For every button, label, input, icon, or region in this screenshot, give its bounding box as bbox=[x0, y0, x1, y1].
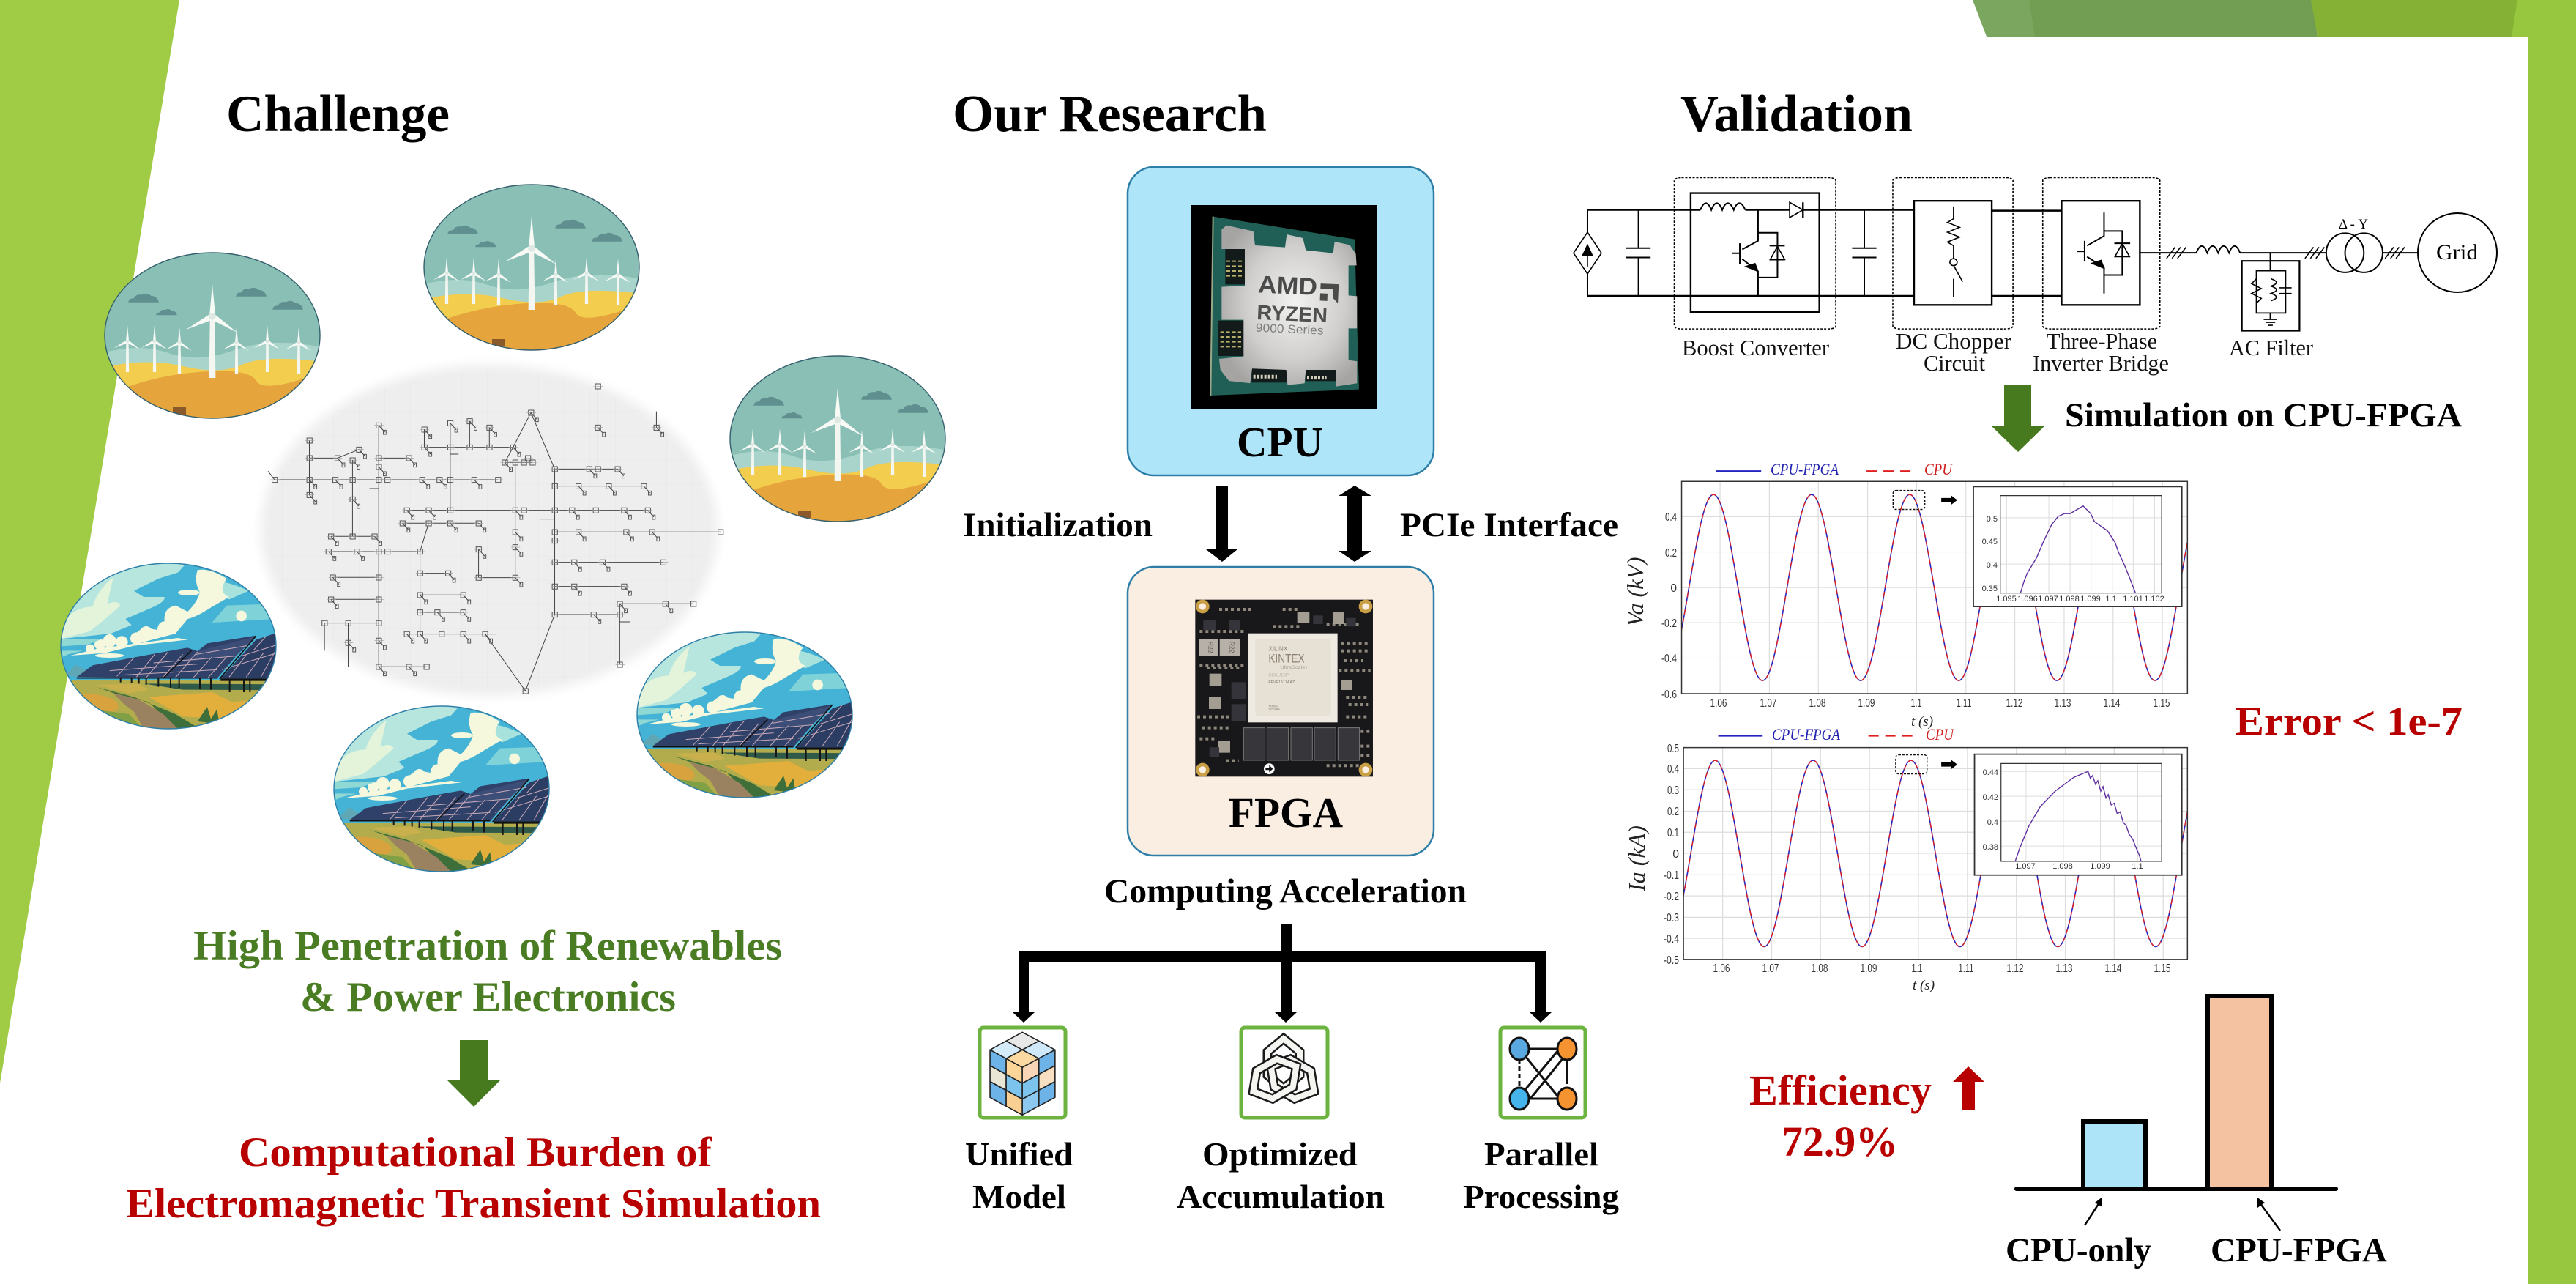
label: unified model: Model bbox=[972, 1178, 1066, 1215]
chart: Ia current: 1.14 bbox=[2104, 962, 2122, 975]
label: optimized accumulation bbox=[1177, 1135, 1385, 1215]
chart: Ia current: Ia (kA) bbox=[1623, 825, 1650, 892]
chart: Va voltage: t (s) bbox=[1911, 714, 1933, 730]
right green strip bbox=[2528, 0, 2576, 1284]
chart: Ia current: 1.08 bbox=[1812, 962, 1828, 975]
chart: Va voltage: 0.4 bbox=[1987, 561, 1998, 570]
arrow: CPU-only pointer bbox=[2085, 1198, 2102, 1225]
label: computing acceleration: Computing Acceleration bbox=[1104, 872, 1467, 910]
chart: Ia current: 0 bbox=[1672, 848, 1679, 861]
green text: renewables: & Power Electronics bbox=[300, 974, 676, 1020]
chart: Va voltage: 1.1 bbox=[1911, 697, 1921, 710]
CPU chip photo: RYZEN bbox=[1257, 301, 1328, 327]
FPGA board photo: UltraScale+ bbox=[1280, 666, 1309, 670]
chart: Va voltage: 0.5 bbox=[1987, 515, 1998, 524]
FPGA board photo: FFVE1517AAZ bbox=[1268, 680, 1295, 685]
label: parallel processing: Parallel bbox=[1484, 1135, 1598, 1173]
chart: Ia current: 1.15 bbox=[2154, 962, 2170, 975]
heading: Our Research: Our Research bbox=[953, 86, 1267, 143]
chart: Ia current: 0.2 bbox=[1667, 806, 1679, 818]
chart: Ia current: 1.1 bbox=[2132, 862, 2143, 871]
chart: Va voltage: 1.09 bbox=[1858, 697, 1875, 710]
chart: Ia current: -0.2 bbox=[1664, 891, 1679, 903]
label: unified model: Unified bbox=[965, 1135, 1073, 1173]
chart: Ia current: 0.44 bbox=[1983, 768, 1998, 777]
chart: Va voltage: 1.14 bbox=[2103, 697, 2121, 710]
FPGA board photo: R22 bbox=[1207, 642, 1214, 653]
circuit labels bbox=[1682, 328, 2314, 376]
chart: Ia current: 1.097 bbox=[2015, 862, 2036, 871]
chart: Ia current: 0.4 bbox=[1987, 818, 1998, 827]
wind farm ellipse 3 bbox=[728, 355, 948, 527]
FPGA board photo: 2205AAA bbox=[1268, 708, 1280, 711]
CPU label: CPU bbox=[1237, 418, 1323, 466]
chart: Va voltage: -0.6 bbox=[1661, 689, 1677, 701]
chart: Ia current: 0.5 bbox=[1667, 743, 1679, 755]
FPGA label: FPGA bbox=[1229, 789, 1343, 836]
chart: Ia current: CPU bbox=[1926, 725, 1955, 743]
chart: Ia current: -0.4 bbox=[1664, 933, 1679, 946]
chart: Ia current: 1.12 bbox=[2006, 962, 2024, 975]
chart: Ia current: 1.13 bbox=[2056, 962, 2072, 975]
label: Initialization: Initialization bbox=[963, 506, 1153, 544]
chart: Va voltage: -0.4 bbox=[1661, 653, 1677, 665]
chart: Ia current: 0.1 bbox=[1667, 827, 1679, 839]
chart: Va voltage: 1.11 bbox=[1957, 697, 1971, 710]
green text: renewables bbox=[193, 923, 782, 1020]
chart: Va voltage: 1.095 bbox=[1996, 595, 2017, 604]
chart: Va voltage: 1.13 bbox=[2055, 697, 2071, 710]
chart: Va voltage: 0.4 bbox=[1665, 511, 1677, 524]
heading: Challenge: Challenge bbox=[226, 86, 450, 143]
chart: Va voltage: 1.096 bbox=[2017, 595, 2038, 604]
chart: Va voltage: 0 bbox=[1670, 582, 1677, 595]
FPGA board photo bbox=[1195, 600, 1373, 776]
wind farm ellipse 1 bbox=[103, 251, 322, 423]
icon: unified model bbox=[980, 1028, 1065, 1118]
chart: Va voltage: 1.06 bbox=[1710, 697, 1727, 710]
arrow: green down bbox=[447, 1040, 501, 1107]
FPGA board photo: XCKU15P bbox=[1268, 673, 1289, 678]
chart: Ia current: 0.3 bbox=[1667, 784, 1679, 797]
chart: Va voltage: 1.08 bbox=[1809, 697, 1826, 710]
power network diagram bbox=[261, 365, 726, 696]
bar chart: efficiency bbox=[2006, 996, 2387, 1269]
chart: Ia current: 1.07 bbox=[1762, 962, 1779, 975]
arrow: PCIe double bbox=[1339, 486, 1371, 562]
chart: Ia current: 0.4 bbox=[1667, 763, 1679, 776]
chart: Va voltage bbox=[1622, 460, 2204, 730]
chart: Va voltage: 1.15 bbox=[2153, 697, 2170, 710]
circuit labels: Boost Converter bbox=[1682, 335, 1830, 360]
chart: Va voltage: 1.12 bbox=[2006, 697, 2022, 710]
label: optimized accumulation: Optimized bbox=[1202, 1135, 1358, 1173]
chart: Va voltage: 1.07 bbox=[1760, 697, 1776, 710]
chart: Ia current: 0.38 bbox=[1983, 843, 1998, 852]
CPU chip photo: AMD bbox=[1257, 271, 1318, 301]
chart: Va voltage: Va (kV) bbox=[1622, 557, 1648, 627]
panel: challenge bbox=[61, 183, 948, 1227]
chart: Va voltage: 1.1 bbox=[2105, 595, 2117, 604]
icon: parallel processing bbox=[1500, 1028, 1585, 1118]
FPGA board photo: XILINX bbox=[1268, 645, 1288, 653]
arrow: CPU-FPGA pointer bbox=[2257, 1198, 2280, 1231]
chart: Va voltage: 0.2 bbox=[1665, 547, 1677, 560]
FPGA board photo: R22 bbox=[1228, 642, 1235, 653]
chart: Ia current: t (s) bbox=[1913, 978, 1935, 993]
CPU chip photo: 9000 Series bbox=[1255, 322, 1324, 338]
chart: Va voltage: 0.35 bbox=[1982, 585, 1998, 593]
label: CPU-FPGA: CPU-FPGA bbox=[2211, 1231, 2387, 1269]
chart: Ia current: 1.09 bbox=[1860, 962, 1877, 975]
FPGA board photo: KINTEX bbox=[1268, 652, 1305, 666]
chart: Va voltage: -0.2 bbox=[1661, 617, 1677, 630]
chart: Ia current: 0.42 bbox=[1983, 793, 1998, 802]
CPU chip photo bbox=[1191, 205, 1377, 409]
arrow: initialization bbox=[1206, 486, 1237, 562]
callout: efficiency: 72.9% bbox=[1782, 1118, 1898, 1165]
CPU box bbox=[1128, 167, 1434, 475]
label: PCIe Interface: PCIe Interface bbox=[1400, 506, 1618, 544]
circuit labels: Three-Phase bbox=[2047, 328, 2157, 354]
chart: Va voltage: 1.101 bbox=[2123, 595, 2143, 604]
red text: computational burden: Computational Burden of bbox=[239, 1129, 712, 1176]
solar farm ellipse 3 bbox=[334, 703, 554, 879]
panel: validation bbox=[1574, 177, 2497, 1269]
tree arrows bbox=[1013, 924, 1552, 1023]
solar farm ellipse 2 bbox=[637, 629, 857, 805]
chart: Ia current: -0.1 bbox=[1664, 869, 1679, 882]
label: unified model bbox=[965, 1135, 1073, 1215]
red text: computational burden: Electromagnetic Transient Simulation bbox=[126, 1181, 821, 1227]
chart: Va voltage: CPU bbox=[1924, 460, 1954, 478]
chart: Ia current: -0.3 bbox=[1664, 912, 1679, 924]
circuit labels: Circuit bbox=[1924, 350, 1985, 376]
label: CPU-only: CPU-only bbox=[2006, 1231, 2151, 1269]
chart: Ia current: 1.098 bbox=[2052, 862, 2073, 871]
callout: error: Error < 1e-7 bbox=[2236, 699, 2463, 743]
label: parallel processing bbox=[1463, 1135, 1619, 1215]
left green wedge bbox=[0, 0, 179, 1083]
green text: renewables: High Penetration of Renewables bbox=[193, 923, 782, 969]
callout: efficiency: Efficiency bbox=[1749, 1066, 1932, 1114]
label: optimized accumulation: Accumulation bbox=[1177, 1178, 1385, 1215]
chart: Va voltage: 1.098 bbox=[2059, 595, 2080, 604]
circuit diagram: Δ - Y bbox=[2339, 217, 2368, 232]
label: simulation on CPU-FPGA: Simulation on CPU-FPGA bbox=[2065, 396, 2462, 434]
chart: Ia current: -0.5 bbox=[1664, 954, 1679, 967]
chart: Ia current bbox=[1623, 725, 2205, 993]
circuit labels: Inverter Bridge bbox=[2033, 350, 2169, 376]
red text: computational burden bbox=[126, 1129, 821, 1227]
circuit diagram bbox=[1574, 177, 2497, 376]
circuit labels: AC Filter bbox=[2229, 335, 2314, 360]
top right green banner bbox=[1973, 0, 2576, 37]
chart: Ia current: CPU-FPGA bbox=[1772, 725, 1840, 743]
chart: Va voltage: 1.099 bbox=[2080, 595, 2101, 604]
circuit diagram: Grid bbox=[2436, 240, 2478, 264]
panel: our research bbox=[963, 167, 1619, 1215]
circuit labels: DC Chopper bbox=[1896, 328, 2012, 354]
label: parallel processing: Processing bbox=[1463, 1178, 1619, 1215]
chart: Va voltage: CPU-FPGA bbox=[1771, 460, 1839, 478]
chart: Ia current: 1.1 bbox=[1911, 962, 1923, 975]
chart: Ia current: 1.099 bbox=[2090, 862, 2110, 871]
arrow: simulation bbox=[1991, 385, 2045, 452]
FPGA board photo: TAIWAN bbox=[1268, 705, 1278, 708]
chart: Ia current: 1.06 bbox=[1713, 962, 1730, 975]
arrow: efficiency up bbox=[1953, 1066, 1984, 1110]
chart: Va voltage: 1.097 bbox=[2038, 595, 2058, 604]
solar farm ellipse 1 bbox=[61, 560, 280, 736]
chart: Va voltage: 1.102 bbox=[2144, 595, 2164, 604]
heading: Validation: Validation bbox=[1680, 86, 1913, 143]
icon: optimized accumulation bbox=[1241, 1028, 1328, 1118]
wind farm ellipse 2 bbox=[422, 183, 641, 355]
chart: Va voltage: 0.45 bbox=[1982, 538, 1998, 546]
chart: Ia current: 1.11 bbox=[1958, 962, 1974, 975]
FPGA box bbox=[1128, 567, 1434, 856]
callout: efficiency bbox=[1749, 1066, 1932, 1165]
